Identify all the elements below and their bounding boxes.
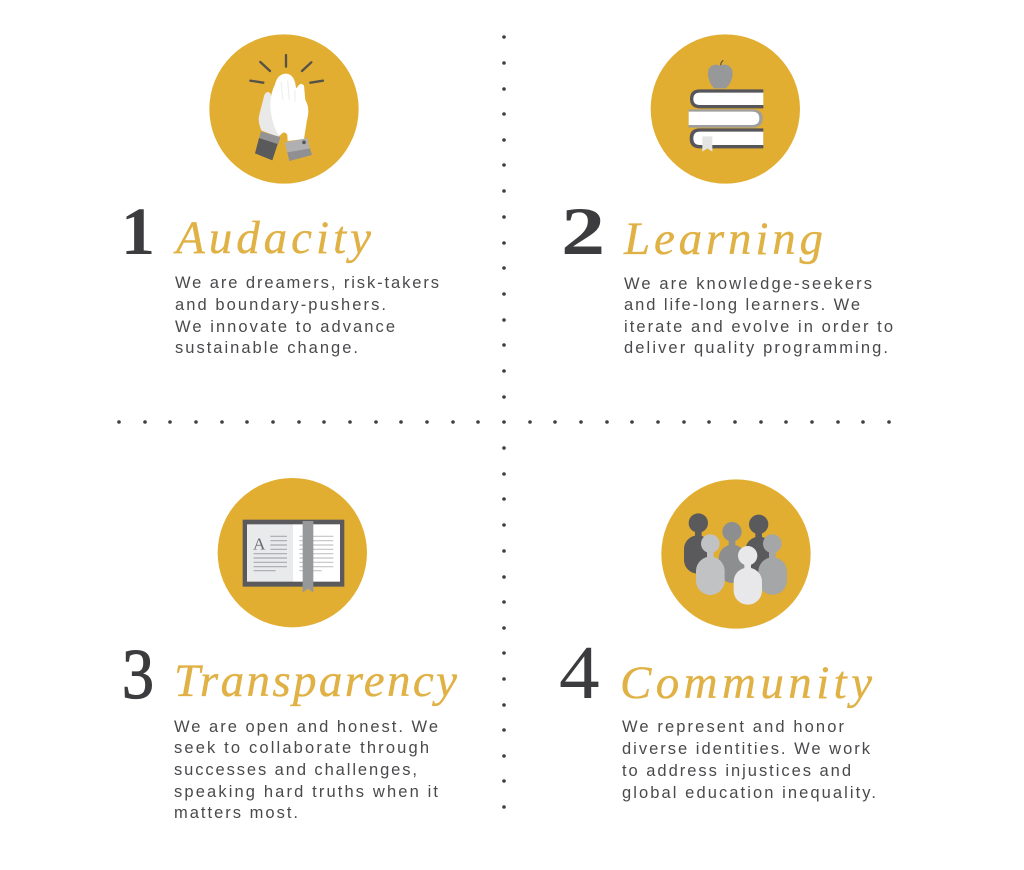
body text: transparency: seek to collaborate through	[174, 739, 429, 757]
heading: Community: Community	[620, 657, 872, 709]
number 2: 2	[561, 195, 605, 270]
body text: learning	[624, 275, 893, 357]
body text: transparency: successes and challenges,	[174, 761, 417, 779]
body text: community: to address injustices and	[622, 762, 851, 780]
body text: community: global education inequality.	[622, 784, 876, 802]
panel: community	[559, 479, 876, 802]
body text: transparency: matters most.	[174, 804, 298, 822]
icon: high five	[209, 34, 359, 184]
body text: audacity	[175, 274, 439, 357]
number 3: 3	[122, 635, 154, 714]
body text: learning: We are knowledge-seekers	[624, 275, 872, 293]
heading: Learning: Learning	[623, 213, 823, 265]
body text: audacity: We are dreamers, risk-takers	[175, 274, 439, 292]
body text: transparency	[174, 718, 438, 822]
icon: group of people	[661, 479, 811, 629]
icon: open book: A	[253, 535, 266, 554]
body text: community: diverse identities. We work	[622, 740, 871, 758]
body text: community	[622, 718, 876, 802]
panel: audacity	[121, 34, 439, 357]
icon: books and apple	[651, 34, 800, 184]
body text: transparency: speaking hard truths when it	[174, 783, 438, 801]
body text: learning: deliver quality programming.	[624, 339, 888, 357]
body text: audacity: We innovate to advance	[175, 318, 395, 336]
body text: audacity: and boundary-pushers.	[175, 296, 386, 314]
heading: Transparency: Transparency	[174, 655, 457, 707]
body text: transparency: We are open and honest. We	[174, 718, 438, 736]
heading: Audacity: Audacity	[173, 212, 371, 264]
body text: audacity: sustainable change.	[175, 339, 358, 357]
panel: learning	[561, 34, 893, 357]
number 1: 1	[121, 193, 155, 269]
icon: open book	[218, 478, 367, 627]
body text: community: We represent and honor	[622, 718, 844, 736]
number 4: 4	[559, 631, 600, 715]
panel: transparency	[122, 478, 457, 822]
body text: learning: iterate and evolve in order to	[624, 318, 893, 336]
body text: learning: and life-long learners. We	[624, 296, 860, 314]
